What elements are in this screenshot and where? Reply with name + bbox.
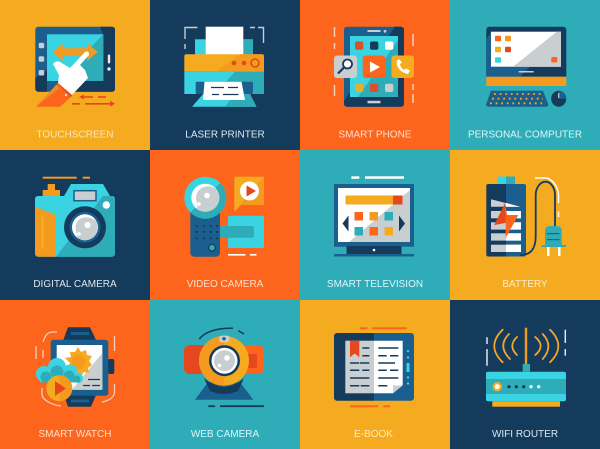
icon: touchscreen tablet xyxy=(35,27,115,92)
panel: smart television xyxy=(300,150,450,300)
icon: smart watch xyxy=(36,327,114,407)
icon: battery with plug xyxy=(486,176,566,256)
icon: printer xyxy=(184,27,264,107)
panel: smart watch xyxy=(0,300,150,449)
panel: laser printer xyxy=(150,0,300,150)
panel: digital camera xyxy=(0,150,150,300)
label: touchscreen: TOUCHSCREEN xyxy=(36,129,114,140)
label: battery: BATTERY xyxy=(502,279,548,290)
icon: video camera xyxy=(184,177,264,257)
icon: phone xyxy=(334,27,414,107)
label: wifi router: WIFI ROUTER xyxy=(492,429,558,440)
label: smart television: SMART TELEVISION xyxy=(327,279,423,290)
label: smart phone: SMART PHONE xyxy=(339,129,412,140)
icon: e-book reader xyxy=(334,327,414,407)
label: personal computer: PERSONAL COMPUTER xyxy=(468,129,582,140)
icon: red swipe arrows xyxy=(72,94,115,106)
icon: television xyxy=(334,176,414,256)
panel: touchscreen xyxy=(0,0,150,150)
icon: camera xyxy=(35,177,115,257)
label: digital camera: DIGITAL CAMERA xyxy=(33,279,117,290)
panel: video camera xyxy=(150,150,300,300)
icon: keyboard xyxy=(486,91,548,107)
label: smart watch: SMART WATCH xyxy=(39,429,111,440)
panel: wifi router xyxy=(450,300,600,449)
icon: wifi router xyxy=(486,328,566,407)
label: web camera: WEB CAMERA xyxy=(191,429,259,440)
icon: web camera xyxy=(184,328,264,407)
panel: web camera xyxy=(150,300,300,449)
panel: personal computer xyxy=(450,0,600,150)
label: video camera: VIDEO CAMERA xyxy=(187,279,264,290)
panel: smart phone xyxy=(300,0,450,150)
icon: computer monitor xyxy=(486,27,566,86)
panel: battery xyxy=(450,150,600,300)
icon: mouse xyxy=(551,91,566,107)
label: laser printer: LASER PRINTER xyxy=(185,129,265,140)
panel: e-book xyxy=(300,300,450,449)
label: e-book: E-BOOK xyxy=(354,429,393,440)
icon: pointing hand xyxy=(36,51,89,107)
